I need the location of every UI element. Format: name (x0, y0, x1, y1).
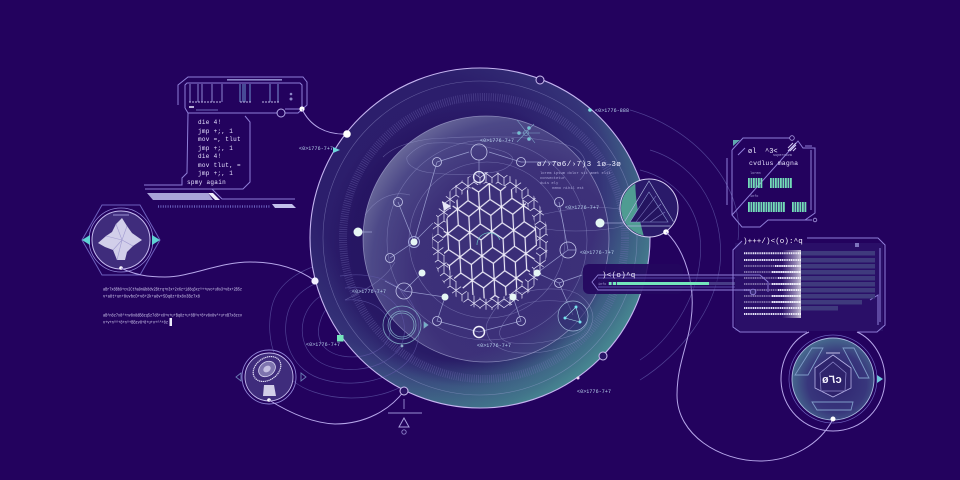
globe: inner lit disc (363, 116, 609, 362)
text block left: v+v+n^^+8+n^+BBzv8+8+u+v+^^+8z (103, 320, 168, 326)
code text: die 4! (198, 119, 221, 126)
node on globe top (536, 76, 544, 84)
globe heading and description: ø/›7ø6/›7)3 1ø→3ø (537, 161, 621, 169)
globe: teal glow on right and lower edge (310, 68, 650, 408)
globe heading and description: lorem ipsum dolor sit amet elit (540, 171, 611, 176)
text block left: aBr7x8Bb9+cv2Ctha9n&b8dv2Btrq+n3x+2x6z+1d8q3xz^++uvo+u0s3+v8x+2B5z (103, 288, 242, 292)
right bars (801, 251, 875, 310)
panel: barcode card: cvdlus magna (749, 160, 798, 167)
globe labels: <0>1776-7+7 (299, 146, 333, 152)
text block left (103, 288, 242, 326)
globe: rings, ticks and contour lines (323, 81, 637, 395)
connector from mesh icon to globe (121, 262, 315, 281)
globe labels: <0>1776-7+7 (480, 138, 514, 144)
globe heading and description: nemo nihil est (552, 186, 584, 191)
node on globe left (311, 277, 319, 285)
icon: radio telescope (236, 350, 306, 404)
connector from progress readout into table (683, 275, 768, 295)
cyan crosshair top of globe (512, 120, 540, 143)
panel: barcode card: øl (748, 148, 756, 156)
code text: die 4! (198, 153, 221, 160)
panel: progress readout (583, 264, 762, 294)
globe nodes (354, 172, 604, 338)
connector from telescope to bottom marker (269, 391, 404, 424)
globe: shadow around inner disc (326, 103, 610, 387)
bottom marker with triangle (388, 387, 422, 434)
text cursor (170, 318, 172, 326)
globe labels (299, 108, 629, 395)
text block left: aB^n8z7x8^+nv8x8dB8zq5z7d8+x8+v+u+Bq8z+u+8B^v+8+v8x8v^+u+xB7x8zcv (103, 314, 242, 318)
text block left: v+a8t+un+8uvbcD+v8+2k+a8v+5Dq8z+8x8x3Bz7x8 (103, 294, 200, 300)
globe labels: <0>1776-7+7 (565, 205, 599, 211)
globe node rings (386, 144, 576, 326)
network links between nodes (358, 152, 668, 332)
code text: spmy again (187, 179, 226, 186)
panel: data table: )+++/)<(o):^q (743, 237, 803, 246)
icon: hexagon mountain mesh (82, 205, 160, 275)
icon: bottom right hexagon dial (781, 332, 885, 431)
code text: mov tlut, = (198, 162, 241, 169)
small triangle network node (558, 301, 588, 331)
code text: jmp +;, 1 (198, 170, 233, 177)
code text: jmp +;, 1 (198, 128, 233, 135)
icon: teal triangle circle (620, 178, 678, 238)
globe: outer disc (310, 68, 650, 408)
globe labels: <0>1776-7+7 (477, 343, 511, 349)
icon: bottom right hexagon dial: ø٦ɔ (822, 375, 842, 387)
globe heading and description: duis ely (540, 181, 559, 186)
icon: faceted sphere (438, 178, 542, 304)
code text (187, 119, 241, 186)
globe outline (310, 68, 650, 408)
globe labels: <0>1776-7+7 (306, 342, 340, 348)
code text: jmp +;, 1 (198, 145, 233, 152)
code text: mov =, tlut (198, 136, 241, 143)
globe labels: <0>1776-7+7 (580, 250, 614, 256)
node on globe lower right (599, 352, 607, 360)
globe labels: <0>1776-7+7 (352, 289, 386, 295)
panel: progress readout: )<(o)^q (602, 271, 636, 280)
panel: barcode card: ^3< (765, 147, 778, 156)
panel: data table (733, 237, 885, 332)
panel: barcode card: info (750, 194, 758, 199)
progress slash bars (147, 193, 213, 200)
globe labels: <0>1776-888 (595, 108, 629, 114)
panel: progress readout: info (598, 282, 606, 287)
concentric target rings (383, 306, 428, 347)
panel: barcode card (727, 136, 817, 227)
connector from code panel to globe (302, 109, 347, 134)
node on globe top left (343, 130, 351, 138)
contour lines behind the globe (270, 110, 739, 398)
icon: green square marker (337, 335, 344, 342)
panel: code listing top left (144, 77, 307, 208)
panel: barcode card: lorem (750, 171, 761, 176)
bar readout (189, 84, 280, 110)
HUD infographic canvas (82, 68, 886, 462)
connector from teal circle to bottom right dial (666, 232, 833, 461)
barcodes (748, 183, 807, 207)
panel: barcode card: supernova (773, 153, 792, 158)
globe labels: <0>1776-7+7 (577, 389, 611, 395)
globe heading and description: consectetur (540, 176, 565, 181)
globe heading and description (537, 161, 621, 191)
left dashed rows (744, 253, 801, 314)
